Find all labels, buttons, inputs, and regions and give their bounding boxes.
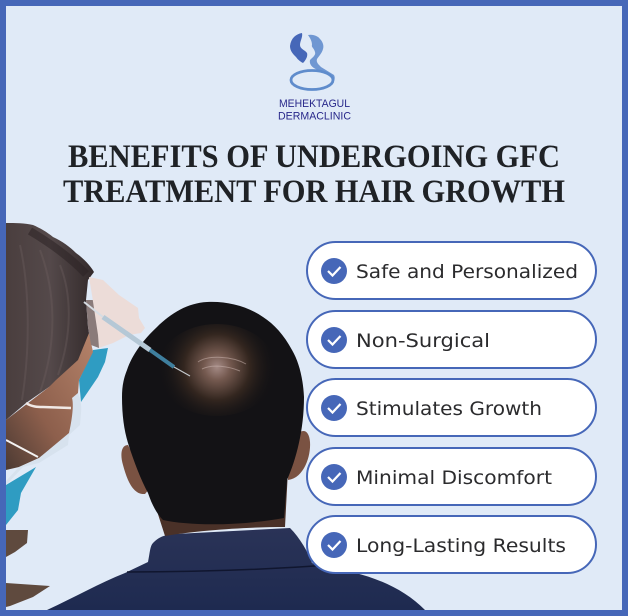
syringe [84, 302, 190, 376]
doctor mask [6, 393, 81, 485]
benefit: non-surgical: Non-Surgical [356, 330, 490, 352]
logo wordmark [278, 98, 351, 122]
benefit: minimal discomfort [307, 448, 596, 505]
patient shirt [47, 528, 425, 610]
loose hair fragments [6, 530, 50, 607]
logo wordmark: DERMACLINIC [278, 110, 351, 122]
benefit: long-lasting results [307, 516, 596, 573]
benefit: safe and personalized: Safe and Personalized [356, 261, 578, 283]
photo: doctor injecting patient's scalp [6, 223, 425, 610]
doctor face [6, 333, 93, 470]
patient neck and ears [121, 431, 310, 536]
logo [278, 33, 351, 122]
benefit: stimulates growth: Stimulates Growth [356, 398, 542, 420]
benefit: stimulates growth [307, 379, 596, 436]
benefit: minimal discomfort: Minimal Discomfort [356, 467, 552, 489]
benefits list [307, 242, 596, 573]
title [63, 138, 565, 209]
doctor glove [86, 277, 145, 348]
doctor blue gown [6, 348, 108, 525]
doctor hair [6, 223, 94, 420]
patient hair [122, 302, 304, 524]
title: TREATMENT FOR HAIR GROWTH [63, 173, 565, 209]
benefit: long-lasting results: Long-Lasting Results [356, 535, 566, 557]
benefit: non-surgical [307, 311, 596, 368]
title: BENEFITS OF UNDERGOING GFC [68, 138, 560, 174]
logo wordmark: MEHEKTAGUL [279, 98, 350, 110]
icon: logo mark [290, 33, 335, 90]
benefit: safe and personalized [307, 242, 596, 299]
